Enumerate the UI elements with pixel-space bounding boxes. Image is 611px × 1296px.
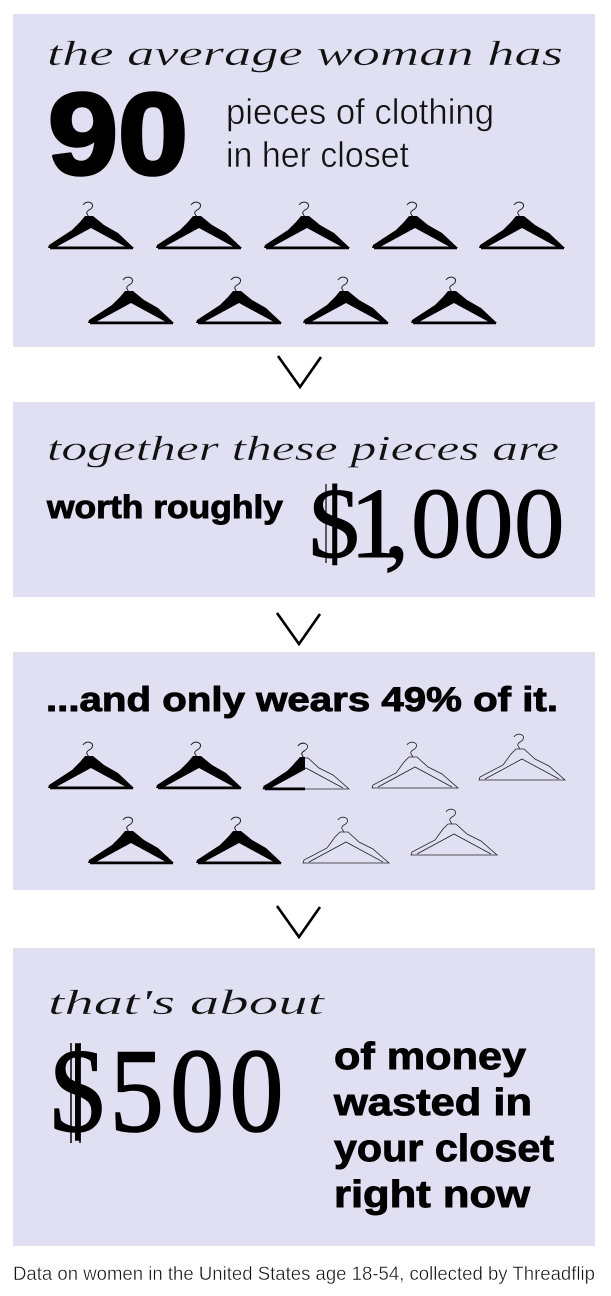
arrow: down chevron 1	[278, 356, 321, 387]
heading: the average woman has: the average woman has	[47, 34, 563, 73]
panel: only wears 49%	[13, 652, 595, 890]
number: $500: $500	[50, 1024, 283, 1157]
arrow: down chevron 2	[277, 613, 320, 644]
text: worth roughly: worth roughly	[46, 489, 283, 525]
text: pieces of clothing in her closet: pieces of clothing	[226, 91, 494, 132]
number: 90: 90	[48, 69, 188, 199]
heading: together these pieces are: together these pieces are	[47, 429, 559, 468]
panel: 90 pieces of clothing	[13, 14, 595, 347]
icons: nine filled hangers	[48, 202, 565, 324]
icons: hangers, part filled	[48, 734, 565, 864]
panel: $500 wasted	[13, 948, 595, 1246]
heading: ...and only wears 49% of it.: ...and only wears 49% of it.	[46, 681, 558, 719]
number: $1,000: $1,000	[309, 467, 564, 579]
panel: worth roughly $1,000	[13, 402, 595, 597]
text: pieces of clothing in her closet	[226, 91, 494, 175]
text: of money wasted in your closet right now: of money	[334, 1036, 526, 1078]
text: of money wasted in your closet right now: right now	[334, 1174, 531, 1216]
heading: that's about: that's about	[48, 983, 326, 1022]
footnote: data source: Data on women in the United States age 18-54, collected by Threadflip	[13, 1264, 595, 1285]
text: of money wasted in your closet right now	[333, 1036, 554, 1216]
text: of money wasted in your closet right now: wasted in	[333, 1082, 532, 1124]
text: pieces of clothing in her closet: in her closet	[226, 134, 409, 175]
text: of money wasted in your closet right now: your closet	[334, 1128, 554, 1170]
arrow: down chevron 3	[277, 906, 320, 937]
